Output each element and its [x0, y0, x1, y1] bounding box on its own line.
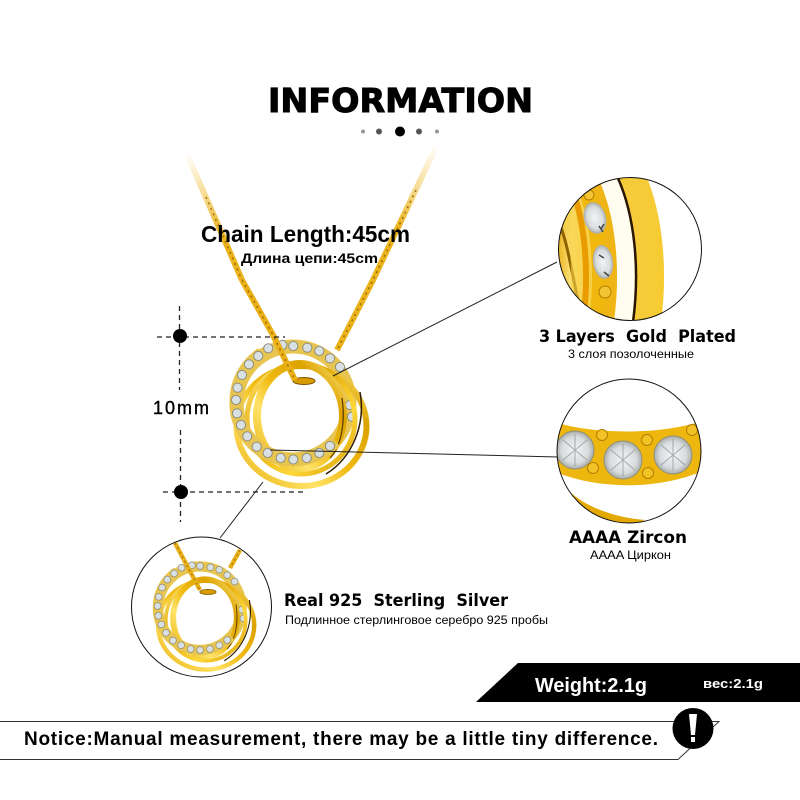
- chain length label: Длина цепи:45cm: [241, 250, 378, 266]
- label: real 925 sterling silver: [284, 591, 548, 627]
- weight banner: вес:2.1g: [703, 676, 763, 691]
- leader lines: [220, 262, 558, 538]
- detail circle: full pendant: [132, 537, 272, 677]
- decorative dots under title: [361, 126, 439, 136]
- chain length label: [201, 221, 410, 266]
- icon: exclamation mark: [672, 708, 714, 749]
- title: INFORMATION: [268, 81, 533, 120]
- necklace chain: left strand: [186, 152, 242, 280]
- pendant: [231, 280, 366, 486]
- label: 3 layers gold plated: 3 Layers Gold Plated: [539, 327, 736, 347]
- pendant size dimension: [153, 306, 303, 522]
- label: AAAA zircon: [569, 528, 687, 562]
- chain length label: Chain Length:45cm: [201, 221, 410, 247]
- pendant size dimension: 10mm: [153, 398, 209, 418]
- notice bar: [0, 708, 719, 760]
- label: 3 layers gold plated: [539, 327, 736, 361]
- label: real 925 sterling silver: Real 925 Sterling Silver: [284, 591, 509, 611]
- label: AAAA zircon: AAAA Zircon: [569, 528, 687, 548]
- weight banner: Weight:2.1g: [535, 675, 647, 697]
- label: AAAA zircon: AAAA Циркон: [590, 548, 671, 562]
- necklace chain: right strand: [337, 145, 437, 350]
- label: 3 layers gold plated: 3 слоя позолоченные: [568, 347, 694, 361]
- detail circle: zircon: [555, 379, 705, 530]
- weight banner: [476, 663, 800, 702]
- label: real 925 sterling silver: Подлинное стерлинговое серебро 925 пробы: [285, 613, 548, 627]
- detail circle: gold plating: [555, 175, 702, 325]
- notice bar: Notice:Manual measurement, there may be a little tiny difference.: [24, 729, 658, 750]
